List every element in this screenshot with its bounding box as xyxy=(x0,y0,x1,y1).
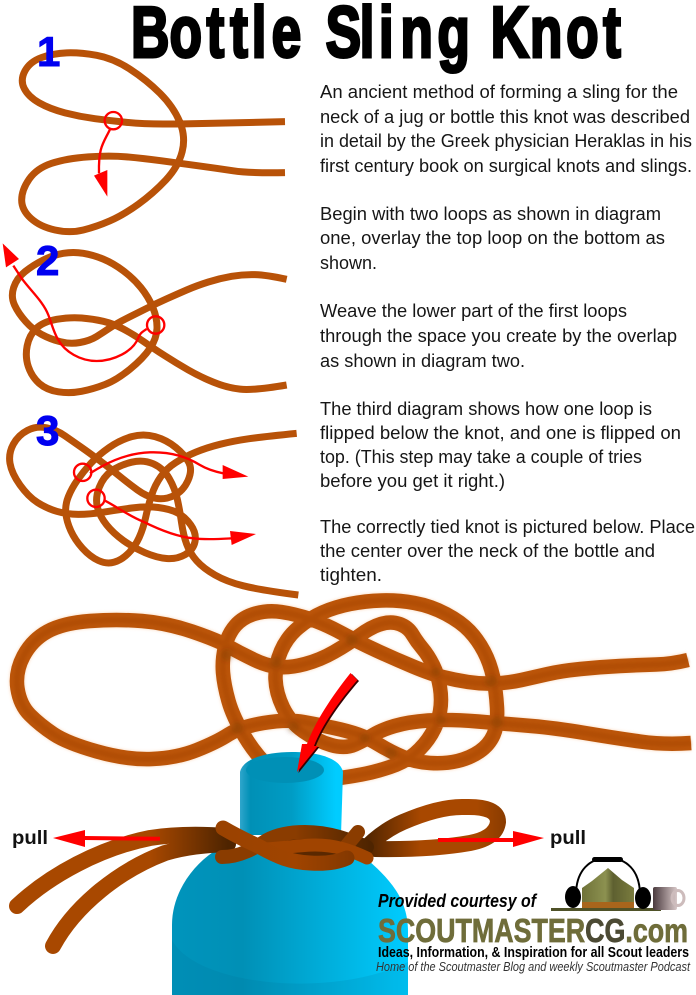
instructions text: as shown in diagram two. xyxy=(320,351,525,371)
courtesy line: Provided courtesy of xyxy=(378,891,538,911)
diagram 3: flipped loops xyxy=(10,427,298,595)
number 3: 3 xyxy=(36,407,59,454)
instructions text: The third diagram shows how one loop is xyxy=(320,399,652,419)
instructions text: The correctly tied knot is pictured below. Place xyxy=(320,517,695,537)
crossing shadows xyxy=(221,634,503,759)
left rope tails xyxy=(17,835,228,946)
right rope loop xyxy=(362,807,498,852)
instructions text: before you get it right.) xyxy=(320,471,505,491)
rope: flipped loops xyxy=(10,427,298,595)
instructions text: tighten. xyxy=(320,565,382,585)
lower red marker and arrow xyxy=(87,490,256,545)
instructions text: Begin with two loops as shown in diagram xyxy=(320,204,661,224)
rope: overlaid loops xyxy=(12,252,287,393)
bottle neck xyxy=(240,752,343,835)
pull arrow right xyxy=(438,831,544,847)
instructions text: An ancient method of forming a sling for the xyxy=(320,82,678,102)
upper red marker and arrow xyxy=(74,452,248,481)
big red arrow xyxy=(297,673,359,773)
number 2: 2 xyxy=(36,237,59,284)
site name: SCOUTMASTERCG.com xyxy=(378,912,688,949)
bottle base shading xyxy=(172,940,408,995)
number 1: 1 xyxy=(37,28,60,75)
instructions text: first century book on surgical knots and slings. xyxy=(320,156,692,176)
instructions text: through the space you create by the overlap xyxy=(320,326,677,346)
logo: Scoutmaster CG xyxy=(376,857,691,974)
knot wraps xyxy=(268,848,350,850)
bottle xyxy=(172,752,408,995)
pull label right: pull xyxy=(550,828,586,849)
knot tightened on bottle neck xyxy=(17,807,498,946)
knot rope xyxy=(17,600,691,782)
instructions text: one, overlay the top loop on the bottom as xyxy=(320,228,665,248)
hat, headphones and mug icon xyxy=(551,857,684,911)
instructions text: shown. xyxy=(320,253,377,273)
instructions text: in detail by the Greek physician Heraklas in his xyxy=(320,131,692,151)
instructions text xyxy=(320,82,695,585)
diagram 2: overlaid loops xyxy=(3,243,287,393)
bottle body xyxy=(172,852,408,995)
red marker and arrow xyxy=(3,243,164,361)
pull arrow left xyxy=(53,830,160,847)
pull label left: pull xyxy=(12,828,48,849)
red marker and arrow xyxy=(94,112,122,197)
large finished knot xyxy=(17,600,691,782)
diagram 1: two loops xyxy=(22,53,285,232)
instructions text: the center over the neck of the bottle and xyxy=(320,541,655,561)
bottle mouth xyxy=(246,757,324,783)
instructions text: flipped below the knot, and one is flipped on xyxy=(320,423,681,443)
instructions text: neck of a jug or bottle this knot was described xyxy=(320,107,690,127)
rope: two loops xyxy=(22,53,285,232)
instructions text: Weave the lower part of the first loops xyxy=(320,301,627,321)
instructions text: top. (This step may take a couple of tries xyxy=(320,447,642,467)
